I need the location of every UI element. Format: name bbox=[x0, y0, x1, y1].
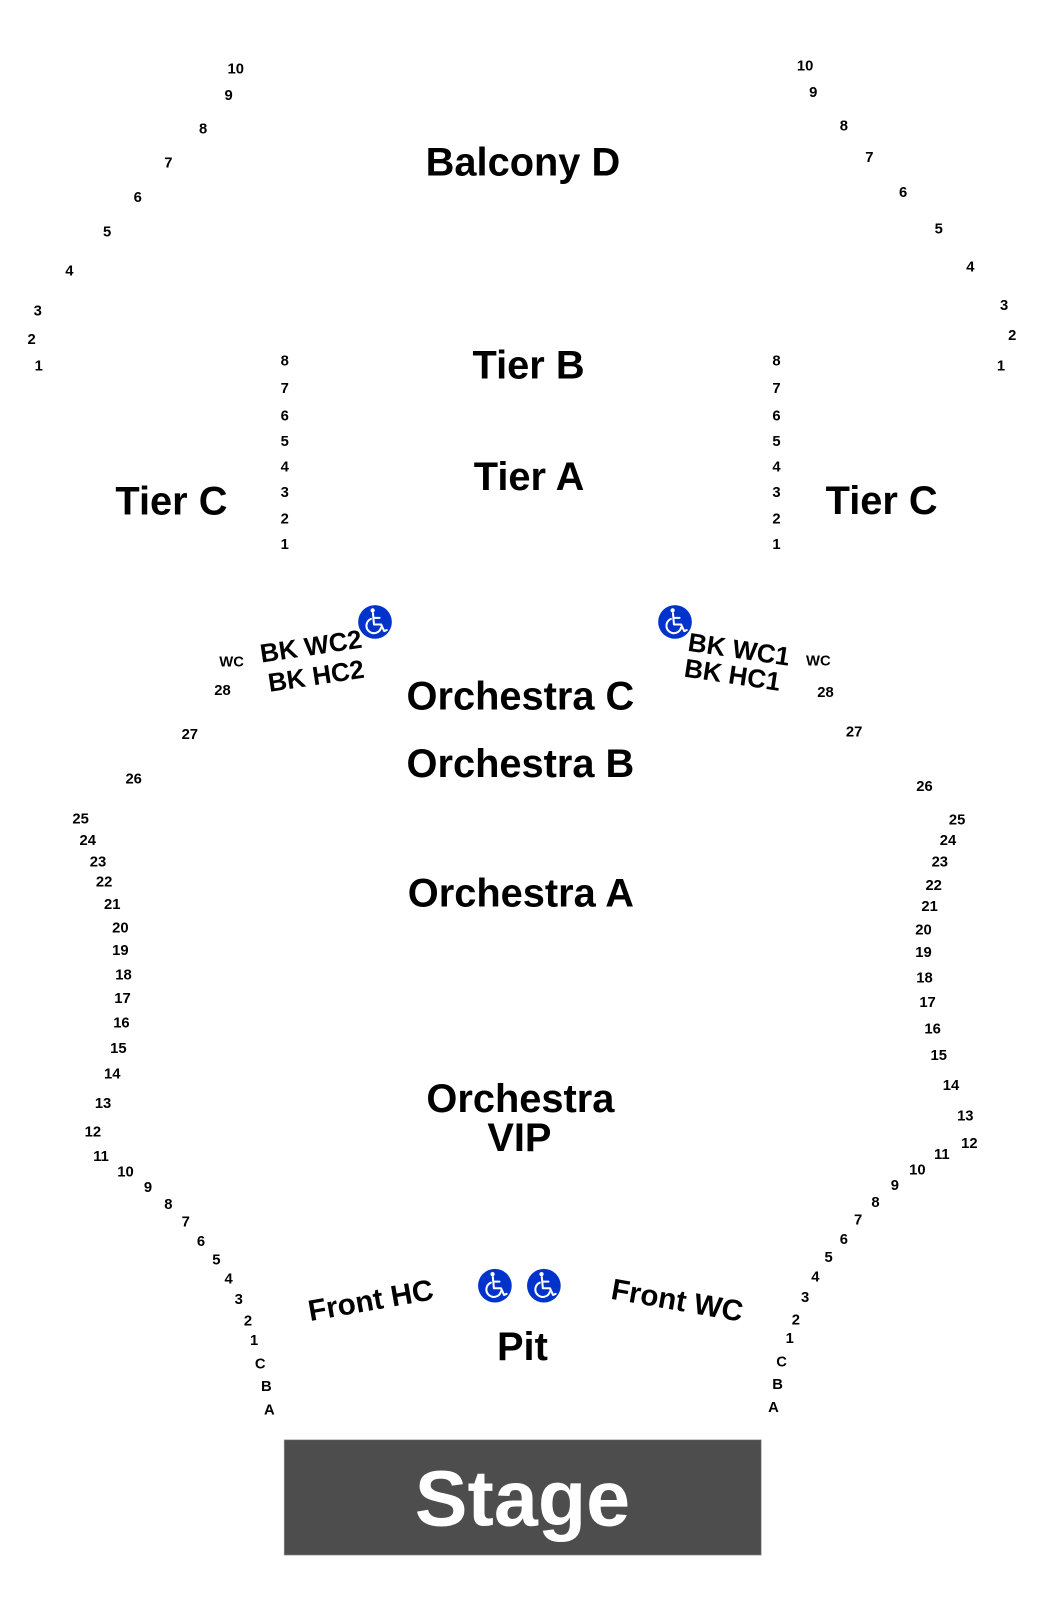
right orchestra row labels: 20 bbox=[915, 923, 932, 939]
icon: wheelchair front left bbox=[478, 1269, 512, 1303]
left orchestra row labels: 10 bbox=[117, 1165, 134, 1181]
left orchestra row labels: 12 bbox=[85, 1125, 101, 1141]
section label: Tier C right: Tier C bbox=[826, 479, 938, 523]
right orchestra row labels: 25 bbox=[949, 812, 965, 828]
left orchestra row labels: 8 bbox=[164, 1197, 172, 1213]
right orchestra row labels: 26 bbox=[916, 779, 933, 795]
right orchestra row labels: B bbox=[772, 1377, 783, 1393]
left balcony row numbers: 3 bbox=[34, 303, 42, 319]
right orchestra row labels: 4 bbox=[811, 1270, 820, 1286]
right tier row numbers: 5 bbox=[772, 434, 781, 450]
left orchestra row labels: 25 bbox=[72, 811, 89, 827]
left orchestra row labels: 4 bbox=[224, 1272, 233, 1288]
right orchestra row labels: 23 bbox=[932, 854, 948, 870]
right balcony row numbers: 7 bbox=[865, 150, 874, 166]
section label: Tier B: Tier B bbox=[473, 344, 585, 388]
right orchestra row labels: C bbox=[776, 1354, 787, 1370]
right orchestra row labels: 9 bbox=[891, 1178, 899, 1194]
left orchestra row labels: 18 bbox=[115, 968, 132, 984]
left orchestra row labels: 28 bbox=[214, 683, 231, 699]
right orchestra row labels: 24 bbox=[940, 833, 957, 849]
left orchestra row labels: A bbox=[264, 1402, 275, 1418]
right orchestra row labels: 11 bbox=[934, 1147, 950, 1163]
left orchestra row labels: 1 bbox=[250, 1333, 258, 1349]
left orchestra row labels: 7 bbox=[182, 1215, 190, 1231]
right orchestra row labels: 5 bbox=[824, 1250, 833, 1266]
left orchestra row labels: 11 bbox=[93, 1149, 109, 1165]
label: Front WC: Front WC bbox=[609, 1273, 746, 1329]
icon: wheelchair front right bbox=[527, 1269, 561, 1303]
section label: Pit: Pit bbox=[497, 1325, 548, 1369]
right orchestra row labels: 8 bbox=[871, 1195, 880, 1211]
label: BK HC1: BK HC1 bbox=[682, 653, 783, 697]
right orchestra row labels: 21 bbox=[921, 899, 938, 915]
left orchestra row labels: 2 bbox=[244, 1314, 252, 1330]
right balcony row numbers: 3 bbox=[1000, 298, 1008, 314]
right orchestra row labels: 16 bbox=[924, 1022, 941, 1038]
left balcony row numbers: 9 bbox=[224, 88, 233, 104]
left tier row numbers: 2 bbox=[281, 511, 289, 527]
left tier row numbers: 8 bbox=[281, 353, 289, 369]
right orchestra row labels: 13 bbox=[957, 1108, 974, 1124]
section label: Balcony D: Balcony D bbox=[426, 141, 620, 185]
right orchestra row labels: 2 bbox=[792, 1312, 800, 1328]
right orchestra row labels: 1 bbox=[786, 1331, 794, 1347]
stage bbox=[284, 1440, 761, 1555]
right orchestra row labels: 12 bbox=[961, 1136, 978, 1152]
left tier row numbers: 5 bbox=[281, 434, 289, 450]
right orchestra row labels bbox=[768, 653, 978, 1416]
left orchestra row labels: 16 bbox=[113, 1016, 130, 1032]
left tier row numbers: 1 bbox=[281, 537, 289, 553]
right orchestra row labels: 10 bbox=[909, 1162, 926, 1178]
left balcony row numbers: 8 bbox=[199, 122, 207, 138]
right tier row numbers: 4 bbox=[772, 459, 781, 475]
right orchestra row labels: 19 bbox=[915, 945, 932, 961]
label: Front HC: Front HC bbox=[306, 1274, 436, 1328]
right orchestra row labels: 6 bbox=[840, 1232, 848, 1248]
section label: Orchestra A: Orchestra A bbox=[408, 872, 634, 916]
left balcony row numbers: 5 bbox=[103, 225, 111, 241]
right orchestra row labels: 27 bbox=[846, 725, 862, 741]
right orchestra row labels: WC bbox=[806, 653, 831, 669]
icon: wheelchair upper left bbox=[358, 605, 392, 639]
left balcony row numbers: 7 bbox=[164, 155, 172, 171]
right balcony row numbers: 2 bbox=[1008, 328, 1016, 344]
section label: Orchestra VIP bbox=[426, 1077, 615, 1160]
left orchestra row labels: 21 bbox=[104, 897, 120, 913]
right orchestra row labels: 7 bbox=[854, 1212, 862, 1228]
label: BK WC1: BK WC1 bbox=[686, 627, 792, 672]
right balcony row numbers: 4 bbox=[966, 259, 975, 275]
left orchestra row labels: WC bbox=[219, 654, 244, 670]
right balcony row numbers: 10 bbox=[797, 58, 813, 74]
right tier row numbers: 6 bbox=[772, 408, 781, 424]
left balcony row numbers: 6 bbox=[134, 190, 142, 206]
left balcony row numbers: 2 bbox=[28, 332, 36, 348]
left tier row numbers: 6 bbox=[281, 408, 289, 424]
left orchestra row labels bbox=[72, 654, 275, 1418]
stage: Stage bbox=[415, 1454, 630, 1543]
right orchestra row labels: 18 bbox=[916, 971, 933, 987]
left orchestra row labels: C bbox=[255, 1356, 266, 1372]
section label: Orchestra VIP: VIP bbox=[487, 1116, 551, 1160]
left orchestra row labels: 5 bbox=[212, 1252, 220, 1268]
section label: Orchestra VIP: Orchestra bbox=[426, 1077, 615, 1121]
label: BK HC2: BK HC2 bbox=[266, 654, 366, 698]
left orchestra row labels: 20 bbox=[112, 921, 129, 937]
right tier row numbers: 3 bbox=[772, 485, 781, 501]
right balcony row numbers: 5 bbox=[935, 222, 943, 238]
right orchestra row labels: 28 bbox=[817, 685, 834, 701]
left orchestra row labels: 14 bbox=[104, 1067, 121, 1083]
left balcony row numbers: 10 bbox=[227, 61, 244, 77]
left orchestra row labels: 3 bbox=[235, 1292, 243, 1308]
section label: Tier C left: Tier C bbox=[115, 479, 227, 523]
left orchestra row labels: 6 bbox=[197, 1234, 205, 1250]
left balcony row numbers: 1 bbox=[35, 358, 43, 374]
left orchestra row labels: 26 bbox=[125, 772, 142, 788]
left orchestra row labels: 17 bbox=[114, 991, 131, 1007]
right balcony row numbers: 6 bbox=[899, 185, 907, 201]
right tier row numbers bbox=[772, 353, 781, 553]
section label: Tier A: Tier A bbox=[474, 455, 584, 499]
left orchestra row labels: 22 bbox=[96, 875, 112, 891]
right balcony row numbers bbox=[797, 58, 1016, 374]
right orchestra row labels: 3 bbox=[801, 1290, 809, 1306]
left orchestra row labels: 27 bbox=[182, 727, 198, 743]
right tier row numbers: 2 bbox=[772, 511, 781, 527]
right tier row numbers: 1 bbox=[772, 537, 781, 553]
right balcony row numbers: 1 bbox=[997, 358, 1005, 374]
right orchestra row labels: 22 bbox=[925, 878, 942, 894]
right orchestra row labels: 15 bbox=[931, 1048, 947, 1064]
left orchestra row labels: 15 bbox=[110, 1041, 127, 1057]
right tier row numbers: 7 bbox=[772, 381, 781, 397]
right balcony row numbers: 9 bbox=[809, 85, 817, 101]
right tier row numbers: 8 bbox=[772, 353, 781, 369]
left balcony row numbers bbox=[28, 61, 244, 374]
icon: wheelchair upper right bbox=[658, 605, 692, 639]
right orchestra row labels: 14 bbox=[943, 1078, 960, 1094]
section label: Orchestra B: Orchestra B bbox=[407, 742, 634, 786]
right balcony row numbers: 8 bbox=[840, 119, 848, 135]
left orchestra row labels: B bbox=[261, 1379, 272, 1395]
left balcony row numbers: 4 bbox=[65, 264, 74, 280]
right orchestra row labels: A bbox=[768, 1400, 779, 1416]
left tier row numbers: 7 bbox=[281, 381, 289, 397]
left orchestra row labels: 23 bbox=[90, 854, 106, 870]
left tier row numbers: 3 bbox=[281, 485, 289, 501]
left orchestra row labels: 19 bbox=[112, 943, 129, 959]
label: BK WC2: BK WC2 bbox=[258, 624, 364, 669]
right orchestra row labels: 17 bbox=[919, 995, 936, 1011]
left tier row numbers bbox=[281, 353, 290, 553]
section label: Orchestra C: Orchestra C bbox=[407, 675, 634, 719]
left orchestra row labels: 13 bbox=[95, 1096, 111, 1112]
left tier row numbers: 4 bbox=[281, 459, 290, 475]
left orchestra row labels: 9 bbox=[144, 1180, 152, 1196]
left orchestra row labels: 24 bbox=[80, 833, 97, 849]
